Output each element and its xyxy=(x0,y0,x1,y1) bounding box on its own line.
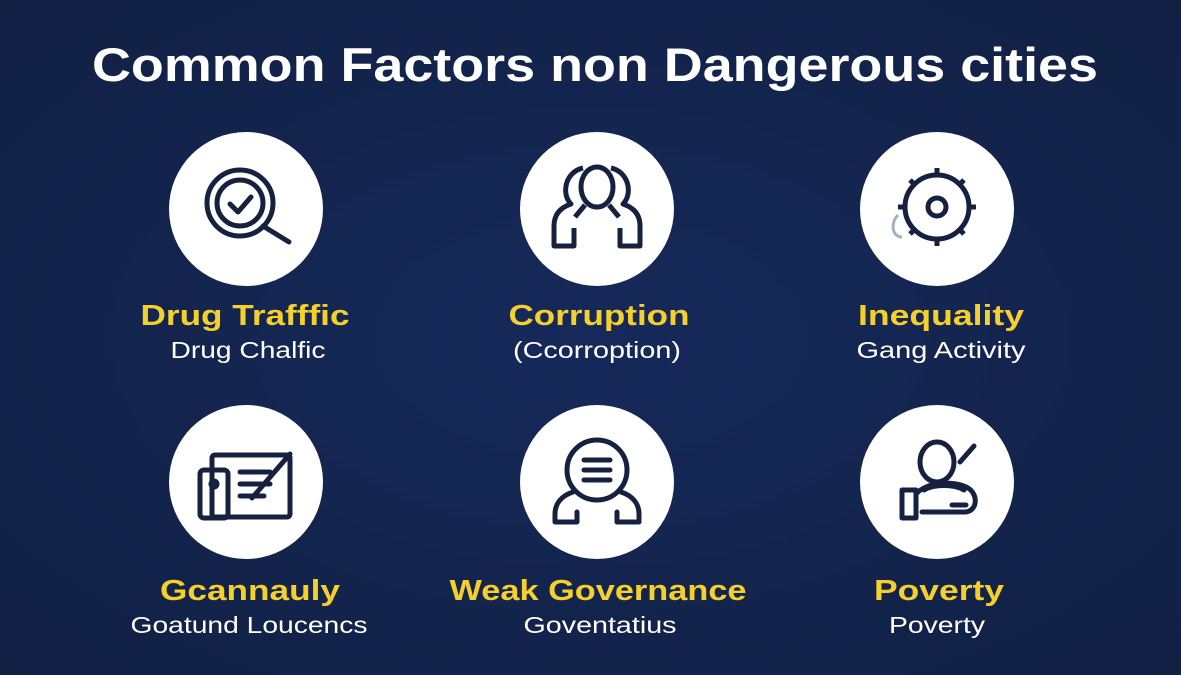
item: gcannauly: Gcannauly xyxy=(160,575,340,607)
item: corruption xyxy=(508,132,690,363)
item: drug traffic: Drug Chalfic xyxy=(170,337,326,363)
item: weak governance: Weak Governance xyxy=(450,575,746,607)
item: inequality: Inequality xyxy=(858,300,1024,332)
item: inequality: Gang Activity xyxy=(856,337,1026,363)
item: poverty xyxy=(860,405,1014,638)
item: inequality xyxy=(856,132,1026,363)
item: gcannauly xyxy=(130,405,368,638)
item: corruption: (Ccorroption) xyxy=(513,337,681,363)
item: poverty: Poverty xyxy=(889,612,986,638)
icon: people xyxy=(554,167,640,246)
item: drug traffic xyxy=(140,132,350,363)
item: gcannauly: Goatund Loucencs xyxy=(130,612,368,638)
icon: hand person xyxy=(902,442,975,518)
item: drug traffic: Drug Trafffic xyxy=(140,300,350,332)
item: poverty: Poverty xyxy=(874,575,1004,607)
title: Common Factors non Dangerous cities xyxy=(92,38,1098,91)
icon: magnifier check xyxy=(207,170,289,242)
item: corruption: Corruption xyxy=(508,300,690,332)
icon: speech person xyxy=(555,440,639,522)
item: weak governance xyxy=(450,405,746,638)
icon: document xyxy=(200,454,290,518)
item: weak governance: Goventatius xyxy=(524,612,676,638)
icon: gear target xyxy=(898,168,976,246)
